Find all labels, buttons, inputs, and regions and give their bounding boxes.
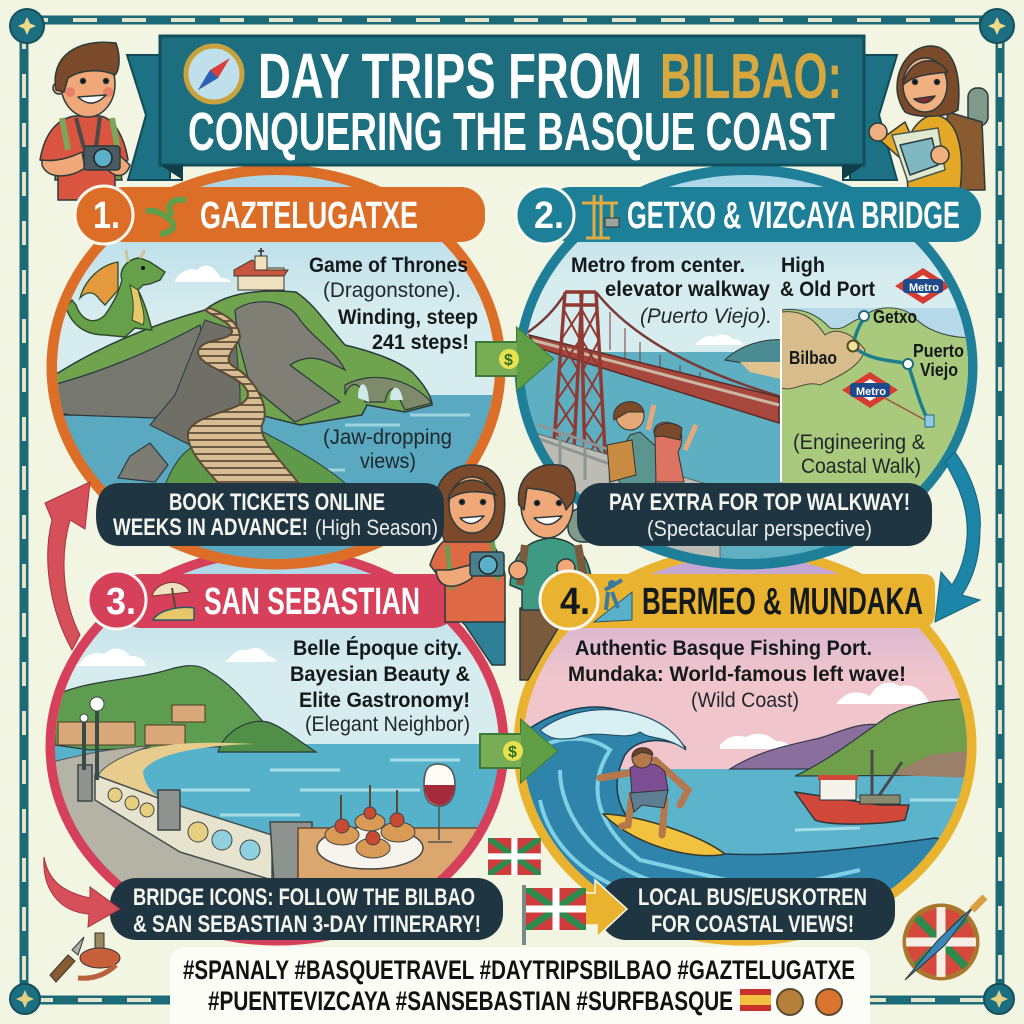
header: San Sebastian: SAN SEBASTIAN [204,581,420,623]
callout: Bermeo tip [600,878,895,940]
callout: Gaztelugatxe tip: (High Season) [315,515,438,540]
icon: compass [186,46,242,102]
callout: Getxo tip [577,483,932,546]
text block: Getxo notes: elevator walkway [605,278,770,301]
text block: Bermeo and Mundaka notes: Mundaka: World-famous left wave! [568,663,906,686]
text block: Bermeo and Mundaka notes: Authentic Basque Fishing Port. [575,637,872,660]
icon: crane [582,195,619,238]
callout: Getxo tip: (Spectacular perspective) [647,516,872,541]
text block: Gaztelugatxe notes [309,254,478,473]
panel: Bermeo and Mundaka scene [510,550,980,950]
map labels: Bilbao [789,348,837,368]
text block: Getxo notes: Metro from center. [571,254,745,277]
panel: Gaztelugatxe scene [40,160,510,575]
arrow: money arrow 1 to 2 [476,328,553,390]
title banner: DAY TRIPS FROM [258,40,642,112]
hashtag box: #PUENTEVIZCAYA #SANSEBASTIAN #SURFBASQUE [208,986,733,1016]
text block: San Sebastian notes [290,637,470,736]
text block: San Sebastian notes: Belle Époque city. [293,637,462,660]
callout: Getxo tip: PAY EXTRA FOR TOP WALKWAY! [609,489,910,516]
traveler: man with camera [40,42,130,200]
callout: Gaztelugatxe tip [96,483,444,546]
header: San Sebastian: 3. [106,581,136,623]
panel: Getxo and Vizcaya Bridge scene [510,160,990,572]
hashtag box [170,947,870,1024]
map labels: Coastal Walk) [801,455,921,478]
map labels: Puerto [913,341,964,361]
arrow: red to bottom pill [44,857,120,927]
traveler: woman with map [869,46,988,190]
header: Gaztelugatxe: GAZTELUGATXE [200,195,418,237]
icon: tools [50,933,120,982]
text block: Gaztelugatxe notes: Game of Thrones [309,254,468,277]
text block: Gaztelugatxe notes: views) [360,450,416,473]
text block: Gaztelugatxe notes: 241 steps! [372,331,469,354]
text block: San Sebastian notes: Elite Gastronomy! [299,689,470,712]
title banner: BILBAO: [660,40,842,112]
header: Getxo and Vizcaya Bridge: 2. [534,195,564,237]
header: Gaztelugatxe: 1. [93,195,120,237]
callout: San Sebastian tip [110,878,503,940]
text block: San Sebastian notes: (Elegant Neighbor) [305,713,470,736]
callout: San Sebastian tip: & SAN SEBASTIAN 3-DAY ITINERARY! [133,911,481,938]
icon: Basque flag on pole [524,885,586,945]
text block: Getxo notes: & Old Port [780,278,875,301]
header: Gaztelugatxe [75,186,485,244]
text block: Gaztelugatxe notes: (Dragonstone). [323,279,461,302]
panel: San Sebastian scene [40,540,510,950]
text block: Gaztelugatxe notes: (Jaw-dropping [323,426,452,449]
icon: Basque compass [905,897,985,980]
arrow: yellow to bottom pill [570,880,627,937]
text block: Getxo notes [571,254,875,328]
icon: Basque flag small [488,838,541,875]
map labels: (Engineering & [793,431,925,454]
text block: Getxo notes: (Puerto Viejo). [640,305,772,328]
text block: San Sebastian notes: Bayesian Beauty & [290,663,470,686]
arrow: money arrow 3 to 4 [480,720,557,782]
map labels: Getxo [873,307,917,327]
callout: San Sebastian tip: BRIDGE ICONS: FOLLOW THE BILBAO [133,884,475,911]
text block: Getxo notes: High [781,254,825,277]
callout: Gaztelugatxe tip: BOOK TICKETS ONLINE [169,489,385,516]
title banner [127,36,897,180]
map labels [789,307,964,478]
arrow: curved blue 2 to 4 [935,452,980,622]
header: Getxo and Vizcaya Bridge [516,186,981,244]
text block: Bermeo and Mundaka notes [568,637,906,712]
icon: small dragon [146,200,186,234]
header: Bermeo and Mundaka [540,571,935,629]
arrow: curved red 3 to 1 [45,482,90,650]
header: San Sebastian [88,571,457,629]
icon: Spanish flag [740,989,771,1011]
header: Bermeo and Mundaka: 4. [560,581,590,623]
callout: Gaztelugatxe tip: WEEKS IN ADVANCE! [113,514,308,541]
map labels: Viejo [920,360,958,380]
callout: Bermeo tip: FOR COASTAL VIEWS! [651,911,854,938]
icon: paella dishes [777,989,842,1015]
icon: beach umbrella [152,582,194,620]
text block: Bermeo and Mundaka notes: (Wild Coast) [691,689,799,712]
icon: surfer [594,580,632,622]
traveler: centre woman with camera [430,465,505,665]
text block: Gaztelugatxe notes: Winding, steep [338,306,478,329]
callout: Bermeo tip: LOCAL BUS/EUSKOTREN [638,884,867,911]
traveler: centre man with backpack [509,465,602,680]
